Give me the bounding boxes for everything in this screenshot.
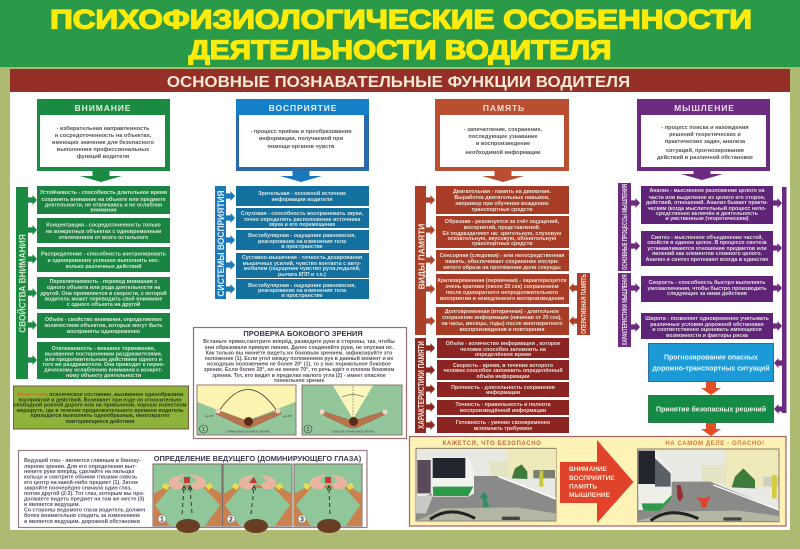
property text: attention: сохранять внимание на объекте или предмете xyxy=(41,196,166,203)
side arrows xyxy=(28,195,37,365)
thinking box text: умозаключения, чтобы быстро производить xyxy=(647,285,767,292)
instruction text: кольцо и смотрите обоими глазами сквозь xyxy=(24,474,138,480)
instruction text: тоннельное зрение xyxy=(274,378,324,384)
instruction text: Как только вы начнёте видеть их боковым зрением, зафиксируйте это xyxy=(206,350,393,356)
illustration 2: tunnel vision xyxy=(302,385,402,435)
thinking box text: и соответственно оценивать имеющиеся xyxy=(652,327,762,333)
memory box text: нятого образа на протяжении доли секунды xyxy=(443,264,561,271)
side label: operative memory xyxy=(577,273,590,335)
memory box text: например при обучении вождению xyxy=(455,200,549,207)
property text: perception: рычага КПП и т.п.) xyxy=(278,272,326,278)
property text: perception: мобилем (ощущение чувство руля,педалей, xyxy=(244,265,361,272)
property text: attention: Распределение - способность контролировать xyxy=(41,250,167,258)
property text: perception: мышечных усилий, чувство контакта с авто- xyxy=(243,260,362,267)
memory box text: человек способен запомнить на xyxy=(460,346,546,353)
property text: attention: на конкретных объектах с одновременным xyxy=(46,228,161,235)
thinking box text: части или выделение из целого его сторон, xyxy=(649,195,766,201)
thinking box text: ческим (когда мыслительный процесс непо- xyxy=(648,205,767,212)
property text: attention: вызванное посторонними раздражителями, xyxy=(45,352,163,358)
title xyxy=(50,6,752,65)
red arrow down xyxy=(701,382,721,395)
definition card: attention: функций водителя xyxy=(77,153,129,160)
definition card: thinking xyxy=(637,99,770,171)
callout: monotony: повторяющиеся действия xyxy=(66,418,134,425)
side label: thinking characteristics: ХАРАКТЕРИСТИКИ МЫШЛЕНИЯ xyxy=(622,274,629,346)
big red arrow: ВОСПРИЯТИЕ xyxy=(569,475,615,482)
illustration 2: tunnel vision: ОПАСНОЕ ТОННЕЛЬНОЕ ЗРЕНИЕ xyxy=(332,430,375,434)
memory box text: транспортных средств xyxy=(471,241,533,247)
property text: attention xyxy=(40,189,167,379)
definition card: thinking: действий в различной обстановке xyxy=(657,154,753,161)
eye panel 1: 1 xyxy=(160,516,164,524)
instruction text: они образовали прямую линию. Далее соединяйте руки, не опуская их. xyxy=(205,344,394,351)
memory type boxes xyxy=(436,186,569,335)
thinking box text xyxy=(645,188,770,339)
callout: monotony xyxy=(13,386,188,429)
white content panel xyxy=(10,92,790,530)
definition card: thinking: решений теоретических и xyxy=(669,131,741,138)
property text: attention: другой. Она проявляется в скорости, с которой xyxy=(40,290,167,297)
property text: attention: или продолжительным действием одного и xyxy=(45,356,162,363)
property text: attention: того же раздражителя. Она приводит к перио- xyxy=(42,362,165,368)
property text: perception: звука и его перемещение xyxy=(269,222,335,228)
property text: perception: реагирование на изменения тела xyxy=(258,239,346,245)
property text: perception: Суставно-мышечная - точность дозирования xyxy=(242,255,362,261)
definition card: memory: последующее узнавание xyxy=(468,134,538,140)
definition card: memory: ПАМЯТЬ xyxy=(483,103,525,113)
subtitle bar xyxy=(10,69,790,92)
memory box text: Кратковременная (первичная) - характеризуется xyxy=(437,278,567,284)
definition card: thinking: - процесс поиска и нахождения xyxy=(661,125,749,131)
instruction text: лярном зрении. Для его определения выт- xyxy=(24,464,137,470)
instruction text: и является ведущим. xyxy=(24,502,81,508)
thinking box text: следующие за ними действия xyxy=(667,290,747,297)
title: ПСИХОФИЗИОЛОГИЧЕСКИЕ ОСОБЕННОСТИ xyxy=(50,6,752,35)
property text: attention: дическому ослаблению внимания к конкрет- xyxy=(44,366,163,374)
memory box text: осязательную, вкусовую, обонятельную xyxy=(448,235,557,242)
memory box text xyxy=(437,189,567,432)
thinking box text: различные условия дорожной обстановки xyxy=(650,321,764,328)
side label: attention properties xyxy=(16,187,28,379)
memory box text: восприятия и немедленного воспроизведения xyxy=(440,296,564,302)
column: thinking xyxy=(618,99,786,436)
memory box text: Сенсорная (следовая) - или непосредственная xyxy=(440,253,564,259)
side arrows xyxy=(226,191,235,294)
property text: attention: водитель может переводить своё внимание xyxy=(45,296,162,302)
box: forecasting: дорожно-транспортных ситуаций xyxy=(652,364,770,372)
definition card: attention xyxy=(37,99,170,171)
side label: operative memory: ОПЕРАТИВНАЯ ПАМЯТЬ xyxy=(581,274,588,334)
thinking box text: Скорость - способность быстро выполнять xyxy=(649,279,766,286)
side label: memory types xyxy=(415,186,426,335)
callout: monotony: маршруте, где в течение продолжительного времени водитель xyxy=(16,408,184,414)
illustration 1: normal side vision xyxy=(197,385,296,435)
memory box text: память, обеспечивает сохранение воспри- xyxy=(445,258,559,265)
thinking box text: средственно включён в деятельность xyxy=(656,211,759,217)
property text: attention: колько различных действий xyxy=(66,263,141,270)
thinking box text: свойств в единое целое. В процессе синтеза xyxy=(647,239,767,246)
illustration 1: normal side vision: до 20° xyxy=(283,414,293,418)
memory box text: Выработка двигательных навыков, xyxy=(454,194,550,201)
property boxes: perception xyxy=(236,186,369,299)
arrow down xyxy=(280,171,322,182)
arrow down xyxy=(681,169,723,180)
illustration 2: tunnel vision: 2 xyxy=(306,427,310,433)
side label: perception systems: СИСТЕМЫ ВОСПРИЯТИЯ xyxy=(216,190,226,297)
eye panel 2: 2 xyxy=(229,516,233,524)
property text: perception: Вестибулярная - ощущение равновесия, xyxy=(248,232,356,239)
memory box text: Образная - реализуется за счёт ощущений, xyxy=(445,218,560,225)
panel: dominant eye xyxy=(18,450,367,533)
big red arrow: ВНИМАНИЕ xyxy=(569,466,608,473)
memory box text: воспроизведённой информации xyxy=(460,407,546,414)
thinking box text: действий, отношений. Анализ бывает практи- xyxy=(646,199,768,206)
heading: seems safe: КАЖЕТСЯ, ЧТО БЕЗОПАСНО xyxy=(443,441,541,447)
memory box text: Двигательная - память на движения. xyxy=(453,189,552,195)
callout: monotony: приходится выполнять однообразные, многократно xyxy=(31,412,170,419)
memory box text: восприятий, представлений. xyxy=(464,224,541,231)
callout: monotony: восприятий и действий. Возникает при езде по относительно xyxy=(18,396,182,404)
property text: perception: реагирование на изменения тела xyxy=(258,288,346,294)
instruction text: зрении. Тот, кто видит в пределах малого угла (2) - имеет опасное xyxy=(212,373,386,379)
property boxes: attention xyxy=(37,186,170,379)
thinking box text: возможности и факторы риска xyxy=(666,332,748,339)
memory box text: человек способен запомнить определённый xyxy=(443,367,563,374)
memory box text: вспомнить требуемое xyxy=(474,425,532,432)
thinking box text: явлений как элементов сложного целого. xyxy=(652,250,762,257)
memory box text: Прочность - длительность сохранения xyxy=(451,385,555,391)
thinking box text: Синтез - мысленное объединение частей, xyxy=(651,234,763,241)
definition card: memory: необходимой информации xyxy=(466,149,541,156)
memory box text: воспроизведения и повторения xyxy=(460,327,544,333)
box: forecasting: Прогнозирование опасных xyxy=(664,354,758,362)
property text: perception: Зрительная - основной источник xyxy=(258,190,346,197)
memory box text: Скорость - время, в течение которого xyxy=(453,363,554,369)
illustration 1: normal side vision: до 20° xyxy=(205,414,215,418)
instruction text: нените руки вперёд, сделайте на пальцах xyxy=(24,468,134,475)
box: forecasting xyxy=(648,344,774,382)
side arrows xyxy=(426,195,435,326)
instruction text: Со стороны ведомого глаза водитель должен xyxy=(24,508,145,514)
memory characteristic boxes xyxy=(437,338,569,433)
callout: monotony: Монотония- психическое состояние, вызванное однообразием xyxy=(17,391,183,398)
eye panel 2 xyxy=(223,464,292,533)
instruction text: должаете видеть предмет на том же месте (3) xyxy=(24,496,144,502)
memory box text: информации xyxy=(486,389,520,396)
side arrows xyxy=(631,198,640,332)
definition card: attention: - избирательная направленность xyxy=(57,125,150,132)
heading: ОПРЕДЕЛЕНИЕ ВЕДУЩЕГО (ДОМИНИРУЮЩЕГО ГЛАЗА) xyxy=(154,454,362,463)
definition card: thinking: ситуаций, прогнозирования xyxy=(666,147,744,154)
definition card: thinking: практических задач, анализа xyxy=(665,139,746,145)
memory box text: сохранение информации (начиная от 20 сек), xyxy=(442,314,562,321)
big red arrow: ПАМЯТЬ xyxy=(569,484,597,490)
property text: attention: количеством объектов, которые могут быть xyxy=(44,322,163,329)
instruction text xyxy=(203,338,395,384)
box: safe decisions xyxy=(648,396,774,422)
instruction text: исходным положением не более 20° (1), то у вас нормальное боковое xyxy=(207,360,391,368)
memory box text: Готовность - умение своевременно xyxy=(456,420,551,426)
memory box text: определённое время xyxy=(475,352,531,358)
definition card: perception: информации, получаемой при xyxy=(259,135,344,142)
property text: attention: отвлечением от всего остального xyxy=(59,235,149,241)
memory box text: на часы, месяцы, годы) после многократного xyxy=(441,321,563,327)
property text: attention: с одного объекта на другой xyxy=(67,301,140,308)
definition card: perception: помощи органов чувств xyxy=(268,144,335,150)
definition card: perception: - процесс приёма и преобразования xyxy=(251,128,351,135)
instruction text: Ведущий глаз - является главным в биноку- xyxy=(24,457,141,464)
instruction text: более внимательно следить за изменением xyxy=(24,512,140,519)
big red arrow xyxy=(560,440,634,523)
thinking box text: устанавливаются отношения предметов или xyxy=(647,246,767,252)
red arrow down xyxy=(701,423,721,436)
definition card: attention: ВНИМАНИЕ xyxy=(75,103,131,113)
photo: seems safe xyxy=(416,448,556,521)
definition card: memory xyxy=(435,99,569,171)
definition card: attention: и сосредоточенность на объектах, xyxy=(55,132,152,139)
eye panel 3: 3 xyxy=(300,516,304,524)
side label: thinking processes: ОСНОВНЫЕ ПРОЦЕССЫ МЫШЛЕНИЯ xyxy=(622,184,629,270)
side label: thinking processes xyxy=(618,183,631,271)
definition card: memory: и воспроизведение xyxy=(476,141,530,147)
feedback line with arrows xyxy=(773,187,786,414)
memory box text: очень кратким (около 20 сек) сохранением xyxy=(445,284,559,290)
memory box text: Точность - правильность и полнота xyxy=(455,402,551,408)
property text: attention: Объём - свойство внимания, определяемое xyxy=(45,316,162,323)
instruction text xyxy=(24,457,145,525)
column: memory xyxy=(415,99,590,433)
instruction text: зрение. Если более 20°, но не менее 70°, то речь идёт о плохом боковом xyxy=(204,366,394,373)
header band xyxy=(0,0,800,67)
side label: memory types: ВИДЫ ПАМЯТИ xyxy=(416,224,426,289)
panel: side vision check xyxy=(194,328,406,438)
thinking box text: и умственным (теоретическим) xyxy=(665,216,749,222)
thinking boxes xyxy=(641,186,773,339)
property text: attention: Устойчивость - способность длительное время xyxy=(40,189,167,196)
memory box text: после однократного непродолжительного xyxy=(446,290,559,296)
definition card: perception: ВОСПРИЯТИЕ xyxy=(269,103,337,113)
operative memory arrows xyxy=(569,283,578,326)
definition card: attention: имеющих значение для безопасного xyxy=(52,139,155,146)
instruction text: его центр на какой-либо предмет (1). Затем xyxy=(24,479,138,486)
side label: attention properties: СВОЙСТВА ВНИМАНИЯ xyxy=(16,234,28,333)
heading: ПРОВЕРКА БОКОВОГО ЗРЕНИЯ xyxy=(243,329,363,338)
side label: thinking characteristics xyxy=(618,273,631,347)
illustration 1: normal side vision: 1 xyxy=(202,427,205,433)
big red arrow: МЫШЛЕНИЕ xyxy=(569,492,611,499)
thinking box text: Анализ - мысленное разложение целого на xyxy=(649,188,765,194)
property text: attention: Отвлекаемость - внешнее торможение, xyxy=(52,346,156,352)
memory box text: объём информации xyxy=(476,373,530,380)
property text: attention: внимания xyxy=(90,208,117,214)
thinking box text: Анализ и синтез протекают всегда в единстве xyxy=(646,257,768,263)
instruction text: положение (1). Если угол между положением рук в данный момент и их xyxy=(205,355,393,362)
box: safe decisions: Принятие безопасных решений xyxy=(656,406,766,414)
property text: attention: Концентрация - сосредоточенность только xyxy=(46,222,161,228)
property text: perception: информации водителя xyxy=(272,196,332,203)
memory box text: Долговременная (вторичная) - длительное xyxy=(445,309,559,315)
memory box text: транспортных средств xyxy=(471,207,533,213)
thinking box text: Широта - позволяет одновременно учитывать xyxy=(645,316,770,322)
definition card: perception xyxy=(236,99,369,171)
instruction text: закройте поочерёдно сначала один глаз, xyxy=(24,484,132,492)
side label: memory characteristics: ХАРАКТЕРИСТИКИ ПАМЯТИ xyxy=(416,341,426,429)
memory box text: Объём - количество информации , которое xyxy=(446,340,560,347)
title: ДЕЯТЕЛЬНОСТИ ВОДИТЕЛЯ xyxy=(189,35,611,65)
instruction text: Встаньте прямо,смотрите вперёд, разведите руки в стороны, так, чтобы xyxy=(203,338,395,345)
property text: attention: Переключаемость - перевод внимания с xyxy=(50,279,157,285)
arrow down xyxy=(482,171,524,182)
property text: attention: одного объекта или рода деятельности на xyxy=(47,284,160,291)
property text: perception: точно определять расположение источника xyxy=(244,217,360,223)
memory box text: Её подразделяют на: зрительную, слуховую xyxy=(442,231,562,237)
callout: monotony: свободной ровной дороге или на привычном, хорошо известном xyxy=(13,402,187,408)
property text: attention: и одновременно успешно выполнять нес- xyxy=(47,258,160,264)
property text: perception: в пространстве xyxy=(281,293,323,299)
property text: attention: восприняты одновременно xyxy=(67,329,141,335)
property text: attention: деятельности, не отвлекаясь и не ослабляя xyxy=(45,202,162,208)
property text: perception: Вестибулярная - ощущение равновесия, xyxy=(248,282,356,289)
arrow down xyxy=(80,171,122,182)
photo: actually dangerous xyxy=(638,449,779,522)
illustration 1: normal side vision: НОРМАЛЬНОЕ БОКОВОЕ ЗРЕНИЕ xyxy=(226,430,270,434)
column: perception xyxy=(215,99,369,299)
property text: attention: ному объекту деятельности xyxy=(66,372,141,379)
property text: perception xyxy=(241,190,364,299)
eye panel 1 xyxy=(153,464,222,533)
definition card: attention: выполнения профессиональных xyxy=(57,146,150,153)
panel: seems safe vs actually dangerous xyxy=(410,436,786,526)
heading: actually dangerous: НА САМОМ ДЕЛЕ - ОПАСНО! xyxy=(665,441,765,447)
eye panel 3 xyxy=(294,464,362,533)
instruction text: и является ведущим. дорожной обстановки xyxy=(24,518,140,525)
subtitle bar: ОСНОВНЫЕ ПОЗНАВАТЕЛЬНЫЕ ФУНКЦИИ ВОДИТЕЛЯ xyxy=(167,74,630,91)
definition card: memory: - запечатление, сохранение, xyxy=(464,127,543,133)
property text: perception: Слуховая - способность воспринимать звуки, xyxy=(241,210,364,217)
instruction text: потом другой (2-3). Тот глаз, которым вы про- xyxy=(24,490,145,497)
property text: perception: в пространстве xyxy=(281,244,323,250)
definition card: thinking: МЫШЛЕНИЕ xyxy=(674,103,735,113)
column: attention xyxy=(16,99,170,379)
